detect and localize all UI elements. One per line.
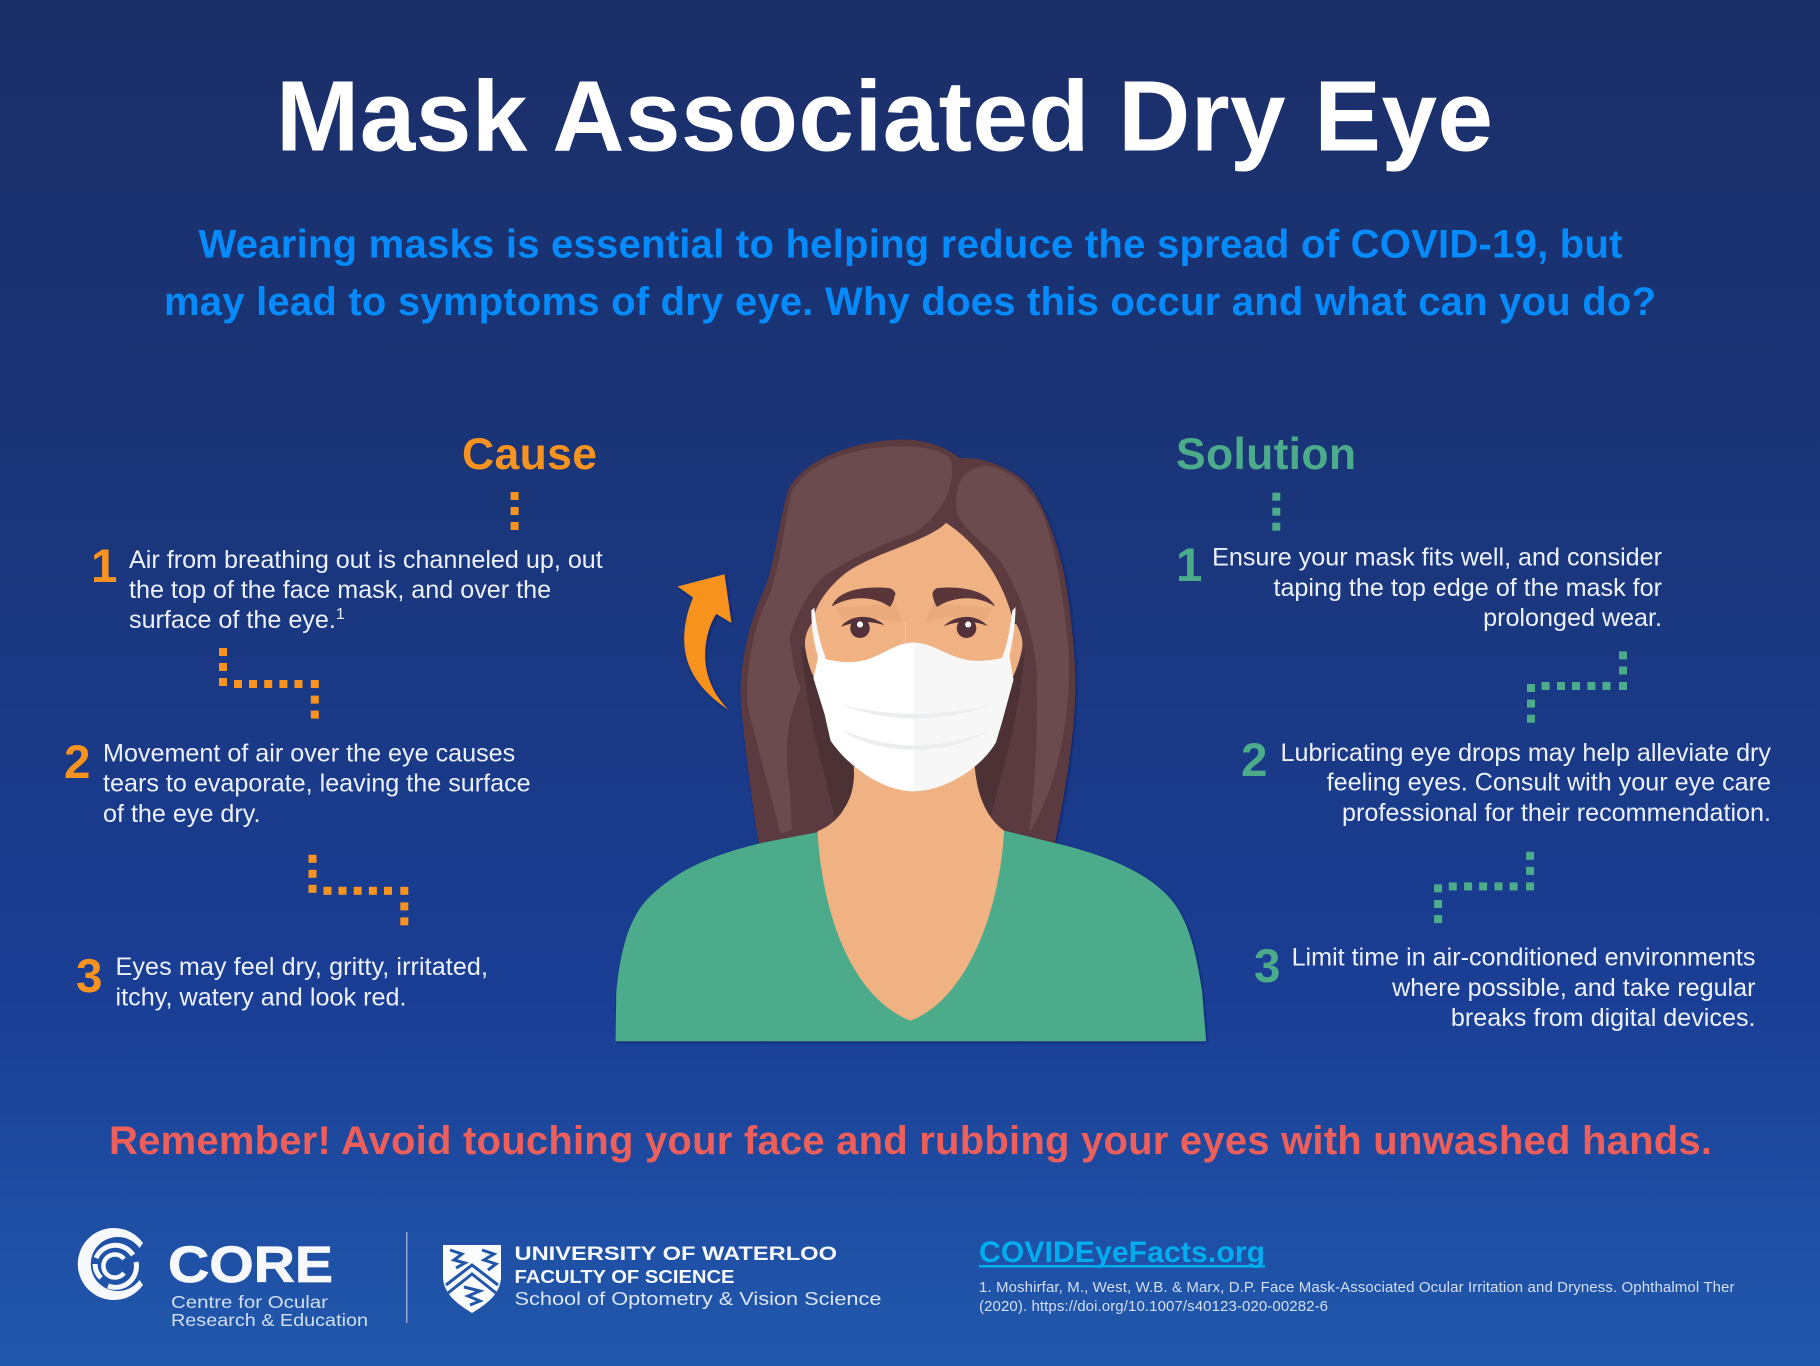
cause 2 text xyxy=(103,740,531,828)
cause 1 text: the top of the face mask, and over the xyxy=(129,576,551,604)
mask folds xyxy=(842,705,991,750)
cause 2 text: Movement of air over the eye causes xyxy=(103,740,515,768)
connector: solution 2 to 3 xyxy=(1434,852,1534,923)
solution 1 text xyxy=(1212,544,1662,632)
connector: solution 1 to 2 xyxy=(1527,651,1627,723)
solution 1 text: Ensure your mask fits well, and consider xyxy=(1212,544,1662,572)
CORE tagline: Research & Education xyxy=(171,1310,368,1330)
number 3: 3 xyxy=(76,950,102,1003)
cause step 2 xyxy=(64,736,531,828)
shirt xyxy=(616,831,1206,1041)
reference: (2020). https://doi.org/10.1007/s40123-020-00282-6 xyxy=(979,1298,1328,1315)
face xyxy=(810,523,1016,779)
heading: solution: Solution xyxy=(1176,430,1356,479)
website link: COVIDEyeFacts.org xyxy=(979,1236,1265,1269)
number 3: 3 xyxy=(1254,940,1280,993)
CORE tagline xyxy=(171,1292,368,1330)
title: Mask Associated Dry Eye xyxy=(276,60,1493,172)
nose xyxy=(904,622,907,644)
neck xyxy=(818,767,1004,910)
panel: solution xyxy=(1176,430,1771,1032)
reference: 1. Moshirfar, M., West, W.B. & Marx, D.P. Face Mask-Associated Ocular Irritation and Dryness. Ophthalmol Ther xyxy=(979,1279,1734,1296)
cause 1 text: surface of the eye. xyxy=(129,606,336,634)
solution 1 text: taping the top edge of the mask for xyxy=(1273,574,1662,602)
number 1: 1 xyxy=(1176,539,1202,592)
cause 3 text xyxy=(116,953,488,1012)
solution 2 text xyxy=(1280,739,1771,827)
cause 3 text: Eyes may feel dry, gritty, irritated, xyxy=(116,953,488,981)
solution 3 text: breaks from digital devices. xyxy=(1451,1004,1756,1032)
connector: cause 2 to 3 xyxy=(308,855,408,925)
solution step 2 xyxy=(1241,734,1771,827)
CORE tagline: Centre for Ocular xyxy=(171,1292,328,1312)
reference xyxy=(979,1279,1734,1315)
solution 3 text: Limit time in air-conditioned environments xyxy=(1292,944,1756,972)
CORE wordmark: CORE xyxy=(168,1236,333,1293)
subtitle: may lead to symptoms of dry eye. Why does this occur and what can you do? xyxy=(164,280,1656,324)
subtitle: Wearing masks is essential to helping reduce the spread of COVID-19, but xyxy=(198,222,1622,266)
number 1: 1 xyxy=(91,540,117,593)
arrow: airflow upward xyxy=(678,574,731,710)
solution step 3 xyxy=(1254,940,1756,1032)
University of Waterloo text: UNIVERSITY OF WATERLOO xyxy=(514,1243,837,1265)
solution 2 text: feeling eyes. Consult with your eye care xyxy=(1327,768,1771,796)
logo: University of Waterloo xyxy=(443,1243,882,1313)
mask straps xyxy=(811,607,1016,689)
eye shading xyxy=(835,604,993,623)
illustration: woman wearing a mask xyxy=(616,439,1206,1041)
CORE icon xyxy=(78,1228,143,1300)
University of Waterloo text: School of Optometry & Vision Science xyxy=(514,1288,882,1309)
cause 2 text: of the eye dry. xyxy=(103,800,260,828)
chin shadow xyxy=(853,767,975,802)
heading: cause: Cause xyxy=(462,430,597,479)
University of Waterloo text: FACULTY OF SCIENCE xyxy=(514,1266,734,1287)
subtitle xyxy=(164,222,1656,324)
University of Waterloo text xyxy=(514,1243,882,1309)
number 2: 2 xyxy=(1241,734,1267,787)
ears xyxy=(805,624,1022,681)
cause 1 text: Air from breathing out is channeled up, out xyxy=(129,546,603,574)
solution 2 text: professional for their recommendation. xyxy=(1342,799,1771,827)
solution 1 text: prolonged wear. xyxy=(1483,604,1662,632)
solution step 1 xyxy=(1176,539,1662,632)
number 2: 2 xyxy=(64,736,90,789)
solution 2 text: Lubricating eye drops may help alleviate dry xyxy=(1280,739,1771,767)
shield xyxy=(443,1245,501,1313)
connector: solution heading to step 1 xyxy=(1272,493,1280,531)
cause 2 text: tears to evaporate, leaving the surface xyxy=(103,770,531,798)
cause 1 text: 1 xyxy=(336,606,345,623)
mask xyxy=(813,642,1013,791)
solution 3 text: where possible, and take regular xyxy=(1391,974,1756,1002)
cause 3 text: itchy, watery and look red. xyxy=(116,984,406,1012)
cause step 1 xyxy=(91,540,603,634)
connector: cause 1 to 2 xyxy=(219,648,319,719)
cause 1 text xyxy=(129,546,603,634)
connector: cause heading to step 1 xyxy=(511,492,519,530)
eyes xyxy=(841,617,988,638)
panel: cause xyxy=(64,430,603,1012)
reminder: Remember! Avoid touching your face and rubbing your eyes with unwashed hands. xyxy=(109,1119,1712,1163)
eyebrows xyxy=(832,587,995,607)
neckline skin xyxy=(818,767,1004,1021)
cause step 3 xyxy=(76,950,488,1012)
hair xyxy=(741,439,1075,844)
solution 3 text xyxy=(1292,944,1756,1032)
logo: CORE xyxy=(78,1228,368,1330)
